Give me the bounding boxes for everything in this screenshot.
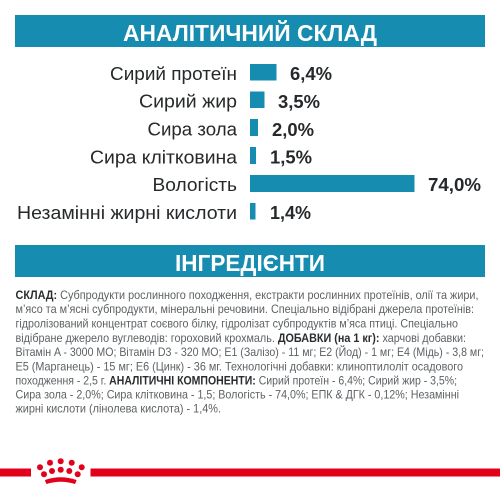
row: crude protein: 6,4% bbox=[290, 64, 332, 84]
footer: red rule with crown logo bbox=[0, 458, 500, 484]
row: crude protein: Сирий протеїн bbox=[110, 63, 237, 84]
text block: ingredients list: відібране джерело вуглеводів: гороховий крохмаль. ДОБАВКИ (на 1 кг): харчові добавки: bbox=[16, 332, 466, 345]
text block: ingredients list: СКЛАД: Субпродукти рослинного походження, екстракти рослинних протеїнів, олії та жири, bbox=[16, 289, 478, 302]
heading: analytical composition: АНАЛІТИЧНИЙ СКЛАД bbox=[123, 19, 377, 46]
row: crude ash: Сира зола bbox=[148, 118, 238, 140]
row: crude fat: 3,5% bbox=[278, 92, 320, 112]
text block: ingredients list: м’ясо та м’ясні субпродукти, мінеральні речовини. Спеціально відібрані джерела протеїнів: bbox=[16, 303, 474, 316]
row: crude fibre: 1,5% bbox=[270, 148, 312, 168]
bar chart: analytical composition bbox=[17, 63, 481, 223]
text block: ingredients list: гідролізований концентрат соєвого білку, гідролізат субпродуктів м’яса птиці. Спеціально bbox=[16, 318, 458, 330]
text block: ingredients list: Сира зола - 2,0%; Сира клітковина - 1,5; Вологість - 74,0%; ЕПК & ДГК - 0,12%; Незамінні bbox=[16, 388, 459, 402]
row: crude fibre bbox=[90, 146, 312, 168]
text block: ingredients list bbox=[16, 289, 484, 416]
text block: ingredients list: E5 (Марганець) - 15 мг; E6 (Цинк) - 36 мг. Технологічні добавки: клиноптилоліт осадового bbox=[16, 360, 463, 374]
heading: ingredients bbox=[15, 245, 485, 277]
row: essential fatty acids: 1,4% bbox=[270, 203, 311, 223]
row: moisture bbox=[152, 174, 481, 195]
row: crude protein bbox=[110, 63, 332, 84]
row: crude ash: 2,0% bbox=[272, 120, 314, 140]
text block: ingredients list: походження - 2,5 г. АНАЛІТИЧНІ КОМПОНЕНТИ: Сирий протеїн - 6,4%; Сирий жир - 3,5%; bbox=[16, 374, 457, 388]
row: moisture: 74,0% bbox=[428, 175, 481, 195]
row: crude fat: Сирий жир bbox=[139, 90, 237, 112]
heading: ingredients: ІНГРЕДІЄНТИ bbox=[175, 250, 325, 276]
row: essential fatty acids: Незамінні жирні кислоти bbox=[17, 202, 237, 223]
text block: ingredients list: жирні кислоти (лінолева кислота) - 1,4%. bbox=[16, 402, 221, 416]
row: crude fat bbox=[139, 90, 320, 112]
row: moisture: Вологість bbox=[152, 174, 237, 195]
icon: royal crown logo bbox=[37, 458, 85, 484]
row: crude ash bbox=[148, 118, 314, 140]
row: crude fibre: Сира клітковина bbox=[90, 146, 238, 168]
heading: analytical composition bbox=[15, 15, 485, 47]
